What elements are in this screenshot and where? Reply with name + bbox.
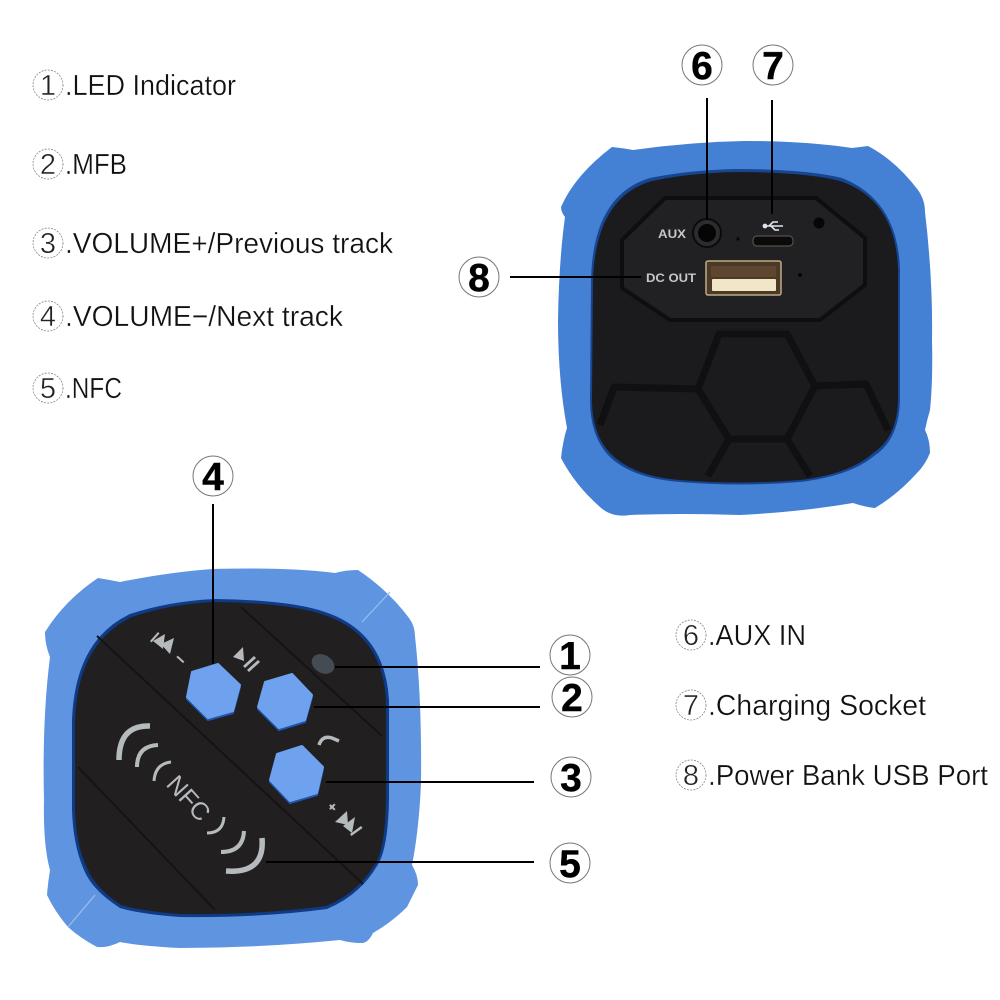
- previous track symbol: [150, 632, 184, 663]
- black body: [75, 602, 386, 914]
- callout 1: 1: [559, 635, 581, 678]
- LED hole: [814, 218, 824, 228]
- micro USB socket: [753, 236, 793, 246]
- legend: port side: [676, 620, 988, 792]
- legend item 4: 4: [40, 301, 56, 333]
- callout 4: [193, 456, 233, 499]
- leader line 6: [706, 98, 708, 220]
- port panel: [622, 198, 865, 320]
- NFC symbol: [119, 726, 262, 871]
- legend item 7: 7: [683, 690, 699, 722]
- AUX label: AUX: [658, 227, 686, 241]
- callout 8: [459, 257, 499, 300]
- legend item 8: .Power Bank USB Port: [708, 760, 988, 792]
- legend item 6: .AUX IN: [708, 620, 806, 652]
- legend item 1: 1: [40, 70, 56, 102]
- legend item 5: 5: [40, 373, 56, 405]
- button: volume- / next: [187, 664, 240, 720]
- legend item 7: .Charging Socket: [708, 690, 926, 722]
- inner case shadow: [72, 599, 389, 917]
- leader line 1: [335, 666, 540, 668]
- LED indicator: [308, 650, 338, 678]
- legend item 2: [33, 149, 127, 181]
- button: volume+ / previous: [270, 746, 323, 803]
- legend item 2: 2: [40, 149, 56, 181]
- phone symbol: [319, 737, 339, 745]
- callout 7: [753, 45, 793, 88]
- callout 4: 4: [202, 456, 224, 499]
- blue silicone case: [558, 141, 932, 516]
- button: MFB: [258, 674, 312, 730]
- callout 6: [682, 45, 722, 88]
- legend item 1: .LED Indicator: [65, 70, 236, 102]
- callout 5: [550, 843, 590, 886]
- speaker: port side view: [558, 141, 932, 516]
- callout 7: 7: [762, 45, 784, 88]
- leader line 7: [771, 100, 773, 214]
- NFC symbol: NFC: [161, 770, 216, 827]
- leader line 5: [266, 861, 534, 863]
- legend item 3: 3: [40, 228, 56, 260]
- callout 5: 5: [559, 843, 581, 886]
- USB port: [706, 261, 781, 295]
- blue silicone case: [44, 568, 421, 948]
- next track symbol: [329, 803, 362, 836]
- case seams: [68, 592, 390, 927]
- callout 3: [551, 757, 591, 800]
- USB symbol: [763, 222, 783, 230]
- legend: bottom-side controls: [33, 70, 393, 405]
- leader line 3: [326, 781, 534, 783]
- legend item 6: 6: [683, 620, 699, 652]
- callout 2: 2: [561, 677, 583, 720]
- callout 3: 3: [560, 757, 582, 800]
- callout 8: 8: [468, 257, 490, 300]
- callout 6: 6: [691, 45, 713, 88]
- honeycomb pattern: [600, 334, 888, 476]
- legend item 4: .VOLUME−/Next track: [65, 301, 343, 333]
- black body: [592, 172, 898, 482]
- leader line 4: [212, 504, 214, 664]
- speaker: button side view: [44, 568, 421, 948]
- callout 2: [552, 677, 592, 720]
- leader line 8: [510, 276, 641, 278]
- small dots: [736, 237, 802, 277]
- legend item 8: 8: [683, 760, 699, 792]
- leader line 2: [314, 706, 540, 708]
- play pause symbol: [233, 647, 260, 672]
- DC OUT label: DC OUT: [646, 271, 697, 285]
- AUX jack: [693, 219, 721, 247]
- inner case shadow: [590, 169, 900, 484]
- callout 1: [550, 635, 590, 678]
- diagonal grooves: [78, 607, 382, 910]
- legend item 2: .MFB: [65, 149, 127, 181]
- legend item 3: .VOLUME+/Previous track: [65, 228, 393, 260]
- legend item 5: [33, 373, 122, 405]
- legend item 5: .NFC: [65, 373, 122, 405]
